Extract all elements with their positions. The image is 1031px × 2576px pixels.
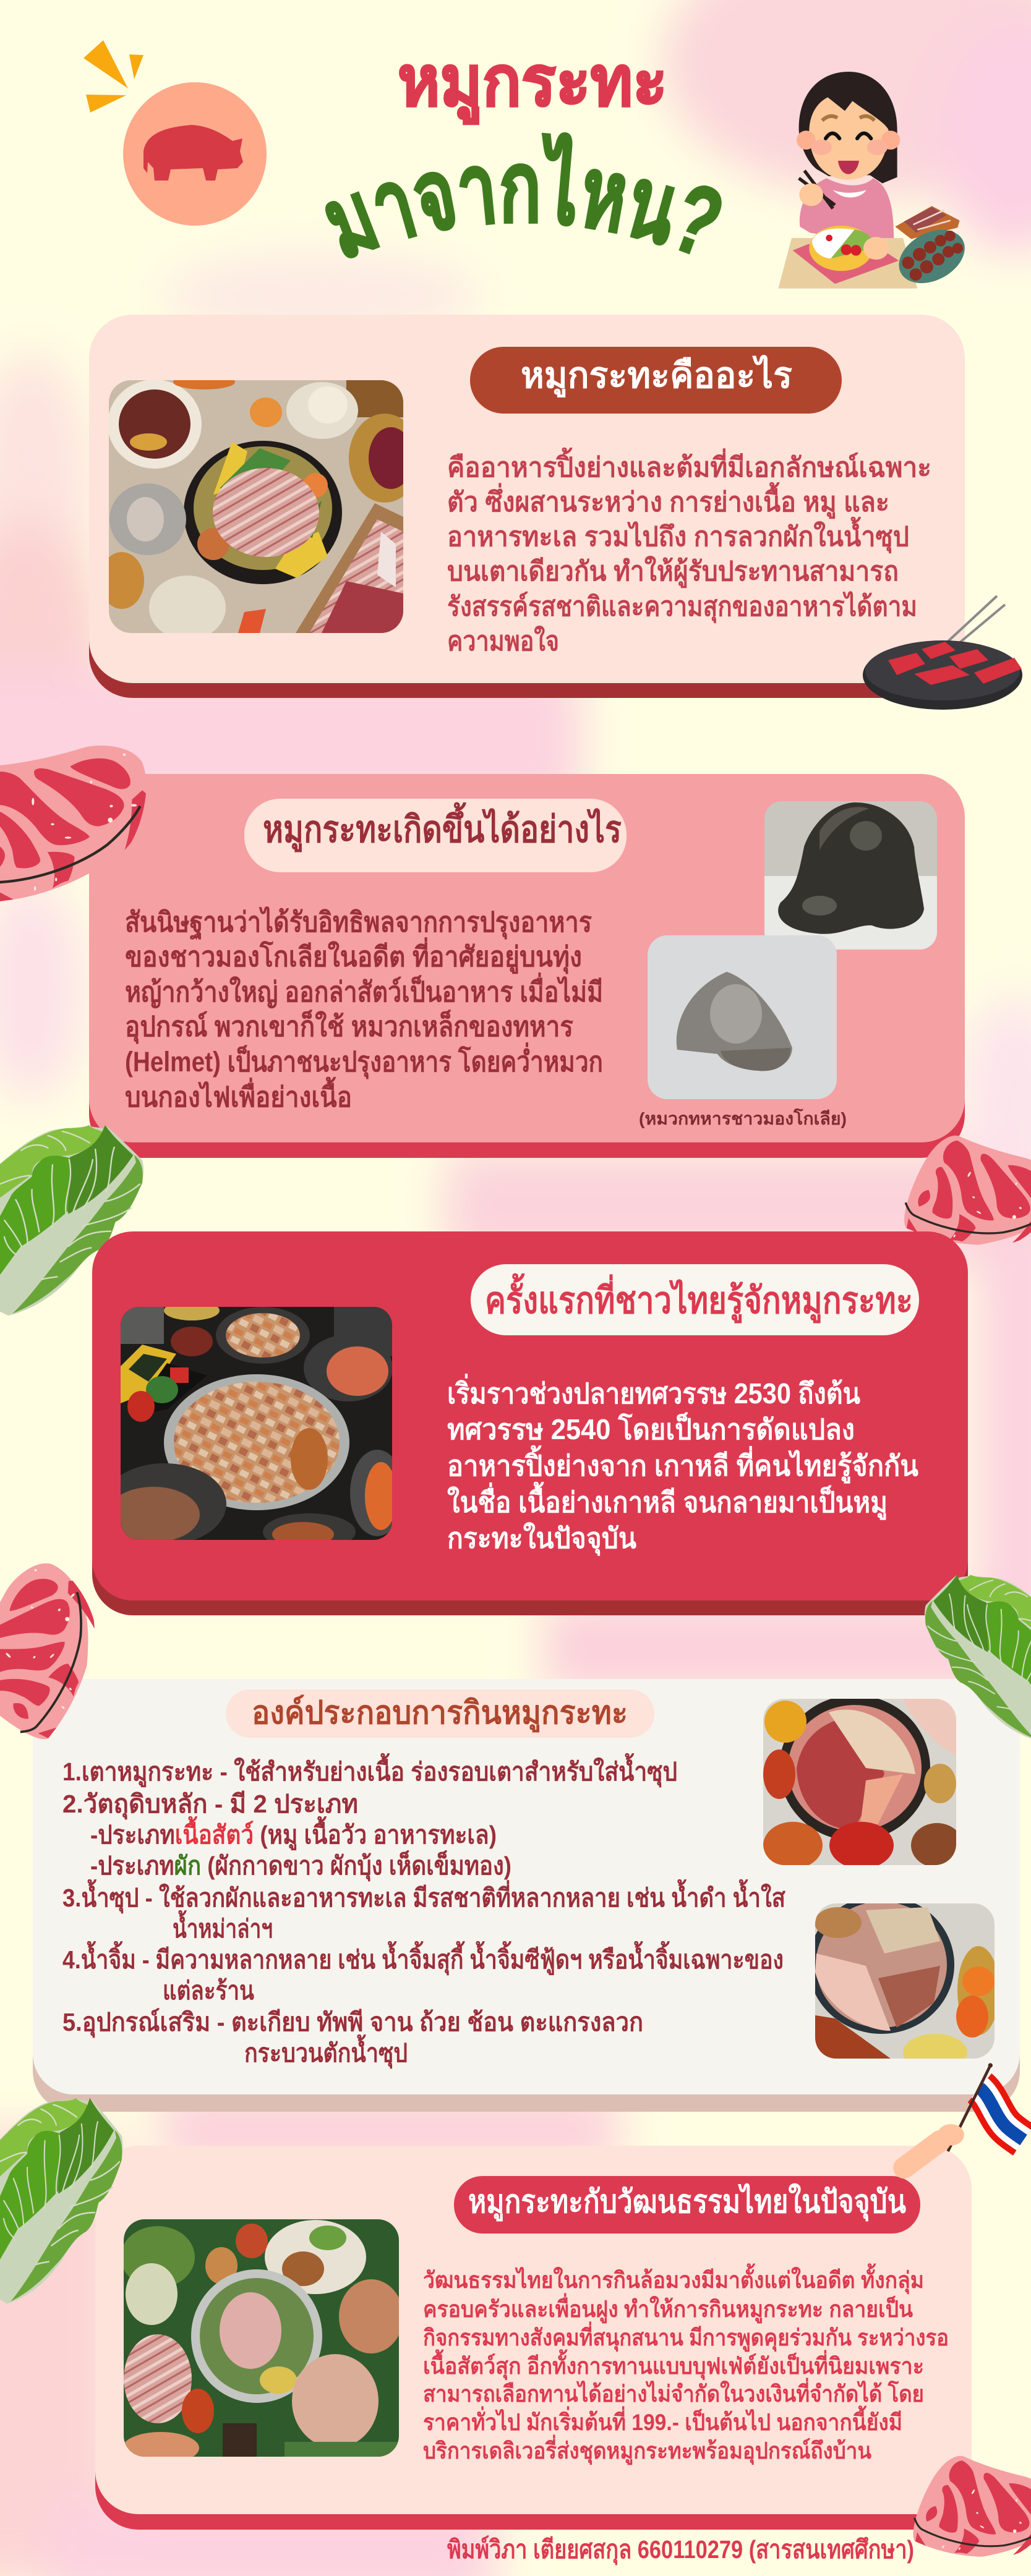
icon: cabbage right — [925, 1575, 1031, 1741]
body text: ในชื่อ เนื้อย่างเกาหลี จนกลายมาเป็นหมู — [447, 1481, 888, 1520]
panel: mookata in Thai culture — [95, 2146, 972, 2530]
body list: น้ำหม่าล่าฯ — [173, 1910, 273, 1943]
heading pill: องค์ประกอบการกินหมูกระทะ — [252, 1694, 628, 1733]
icon: pig in circle — [123, 82, 267, 226]
heading pill — [471, 1264, 919, 1335]
body text — [423, 2263, 949, 2465]
icon: meat upper left — [0, 746, 146, 901]
body list — [62, 1753, 785, 2069]
heading pill — [226, 1690, 654, 1738]
body list: -ประเภทผัก (ผักกาดขาว ผักบุ้ง เห็ดเข็มทอง) — [90, 1850, 511, 1882]
body list: แต่ละร้าน — [163, 1976, 254, 2005]
photo: meat platter — [815, 1903, 995, 2059]
body text: สามารถเลือกทานได้อย่างไม่จำกัดในวงเงินที่จำกัดได้ โดย — [423, 2378, 924, 2407]
photo: black helmet — [764, 801, 937, 950]
body text: รังสรรค์รสชาติและความสุกของอาหารได้ตาม — [447, 590, 917, 624]
photo: mookata table spread — [109, 380, 403, 633]
icon: meat lower right — [901, 2436, 1031, 2576]
body text — [125, 906, 603, 1113]
body text: บนเตาเดียวกัน ทำให้ผู้รับประทานสามารถ — [447, 555, 899, 588]
body text: ของชาวมองโกเลียในอดีต ที่อาศัยอยู่บนทุ่ง — [125, 937, 582, 974]
body list: 2.วัตถุดิบหลัก - มี 2 ประเภท — [62, 1790, 358, 1820]
icon: hand holding Thai flag — [904, 2063, 1024, 2168]
body text: บริการเดลิเวอรี่ส่งชุดหมูกระทะพร้อมอุปกรณ์ถึงบ้าน — [423, 2434, 871, 2465]
icon: grill with chopsticks — [863, 596, 1022, 710]
photo: hotpot with meat — [763, 1695, 963, 1869]
title: line 1: หมูกระทะ — [398, 43, 667, 124]
panel: components of eating mookata — [33, 1679, 1020, 2112]
body text: อุปกรณ์ พวกเขาก็ใช้ หมวกเหล็กของทหาร — [125, 1010, 573, 1044]
body text: ราคาทั่วไป มักเริ่มต้นที่ 199.- เป็นต้นไป นอกจากนี้ยังมี — [423, 2405, 902, 2435]
panel: what is mookata — [89, 315, 965, 698]
icon: cabbage left — [0, 1125, 143, 1316]
body text: อาหารทะเล รวมไปถึง การลวกผักในน้ำซุป — [447, 516, 909, 554]
body list: -ประเภทเนื้อสัตว์ (หมู เนื้อวัว อาหารทะเล) — [90, 1816, 497, 1851]
body text: ตัว ซึ่งผสานระหว่าง การย่างเนื้อ หมู และ — [447, 482, 889, 519]
body text: เนื้อสัตว์สุก อีกทั้งการทานแบบบุฟเฟ่ต์ยังเป็นที่นิยมเพราะ — [423, 2349, 924, 2381]
panel: first time in Thailand — [92, 1231, 968, 1615]
heading pill: หมูกระทะคืออะไร — [521, 355, 792, 397]
icon: girl eating — [778, 72, 974, 294]
body text: บนกองไฟเพื่อย่างเนื้อ — [125, 1076, 352, 1113]
body text: หญ้ากว้างใหญ่ ออกล่าสัตว์เป็นอาหาร เมื่อไม่มี — [125, 972, 603, 1008]
title: line 2 arched: มาจากไหน? — [325, 132, 722, 258]
body text: ความพอใจ — [447, 625, 559, 657]
body text: กระทะในปัจจุบัน — [447, 1521, 637, 1556]
heading pill — [244, 799, 627, 872]
body list: 4.น้ำจิ้ม - มีความหลากหลาย เช่น น้ำจิ้มสุกี้ น้ำจิ้มซีฟู้ดฯ หรือน้ำจิ้มเฉพาะของ — [62, 1941, 784, 1976]
body text: ครอบครัวและเพื่อนฝูง ทำให้การกินหมูกระทะ กลายเป็น — [423, 2293, 913, 2324]
icon: meat right — [891, 1114, 1031, 1286]
body text: เริ่มราวช่วงปลายทศวรรษ 2530 ถึงต้น — [447, 1374, 860, 1409]
photo: silver Mongol helmet — [648, 935, 837, 1099]
footer credit: พิมพ์วิภา เตียยศสกุล 660110279 (สารสนเทศศึกษา) — [447, 2535, 914, 2565]
heading pill: หมูกระทะกับวัฒนธรรมไทยในปัจจุบัน — [468, 2183, 906, 2222]
heading pill: หมูกระทะเกิดขึ้นได้อย่างไร — [263, 802, 622, 852]
caption: (หมวกทหารชาวมองโกเลีย) — [639, 1108, 847, 1128]
body list: กระบวนตักน้ำซุป — [244, 2034, 408, 2069]
body text: วัฒนธรรมไทยในการกินล้อมวงมีมาตั้งแต่ในอดีต ทั้งกลุ่ม — [423, 2263, 924, 2295]
body text: อาหารปิ้งย่างจาก เกาหลี ที่คนไทยรู้จักกัน — [447, 1445, 919, 1484]
photo: buffet table — [121, 2219, 403, 2464]
body text: (Helmet) เป็นภาชนะปรุงอาหาร โดยคว่ำหมวก — [125, 1042, 603, 1079]
body text — [447, 447, 931, 657]
body text — [447, 1374, 919, 1556]
body text: ทศวรรษ 2540 โดยเป็นการดัดแปลง — [447, 1412, 855, 1445]
heading pill — [454, 2176, 920, 2234]
body text: คืออาหารปิ้งย่างและต้มที่มีเอกลักษณ์เฉพาะ — [447, 447, 931, 483]
body text: สันนิษฐานว่าได้รับอิทธิพลจากการปรุงอาหาร — [125, 906, 592, 940]
body list: 5.อุปกรณ์เสริม - ตะเกียบ ทัพพี จาน ถ้วย ช้อน ตะแกรงลวก — [62, 2008, 643, 2038]
icon: meat lower left — [0, 1551, 139, 1752]
icon: cabbage lower left — [0, 2098, 122, 2304]
body list: 3.น้ำซุป - ใช้ลวกผักและอาหารทะเล มีรสชาติที่หลากหลาย เช่น น้ำดำ น้ำใส — [62, 1879, 785, 1914]
body text: กิจกรรมทางสังคมที่สนุกสนาน มีการพูดคุยร่วมกัน ระหว่างรอ — [423, 2321, 949, 2352]
body list: 1.เตาหมูกระทะ - ใช้สำหรับย่างเนื้อ ร่องรอบเตาสำหรับใส่น้ำซุป — [62, 1753, 677, 1788]
heading pill — [470, 347, 842, 414]
icon: orange sparkle — [83, 40, 143, 113]
panel: how mookata began — [89, 774, 965, 1158]
photo: grilled pork platter — [121, 1307, 392, 1540]
heading pill: ครั้งแรกที่ชาวไทยรู้จักหมูกระทะ — [485, 1273, 913, 1324]
